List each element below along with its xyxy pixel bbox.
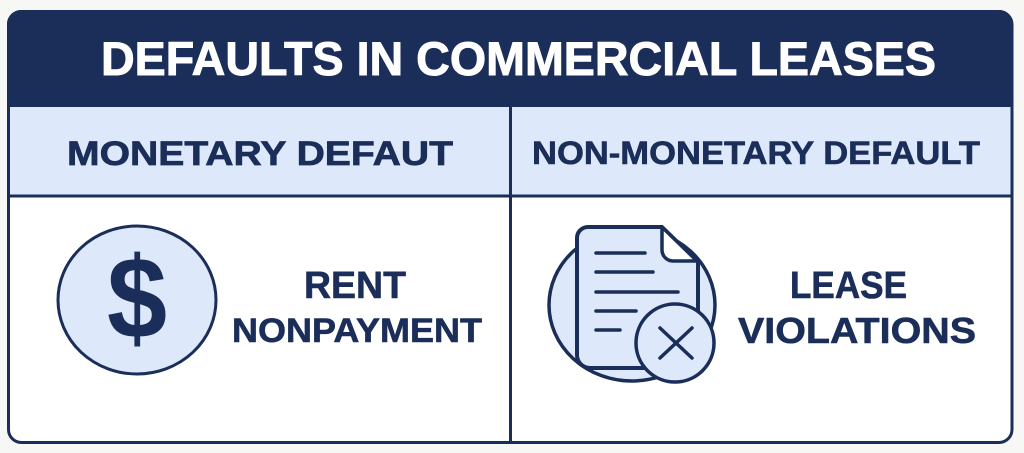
icon: dollar coin: $ xyxy=(107,233,167,363)
heading: monetary default: MONETARY DEFAUT xyxy=(67,135,453,173)
heading: non-monetary default: NON-MONETARY DEFAULT xyxy=(532,135,980,171)
label: rent nonpayment: NONPAYMENT xyxy=(232,312,482,350)
document sheet xyxy=(577,227,698,368)
title: DEFAULTS IN COMMERCIAL LEASES xyxy=(101,32,936,85)
icon: dollar coin xyxy=(58,226,216,374)
folded corner xyxy=(662,227,697,261)
icon: document with x mark xyxy=(549,227,715,382)
label: rent nonpayment xyxy=(232,265,482,350)
title banner xyxy=(7,10,1013,107)
label: lease violations xyxy=(738,265,976,351)
label: rent nonpayment: RENT xyxy=(304,265,406,307)
document text lines xyxy=(596,253,678,330)
panel: non-monetary header band xyxy=(511,107,1012,196)
label: lease violations: LEASE xyxy=(790,265,907,307)
panel: monetary header band xyxy=(9,107,510,196)
x badge xyxy=(636,304,714,382)
label: lease violations: VIOLATIONS xyxy=(738,310,976,351)
